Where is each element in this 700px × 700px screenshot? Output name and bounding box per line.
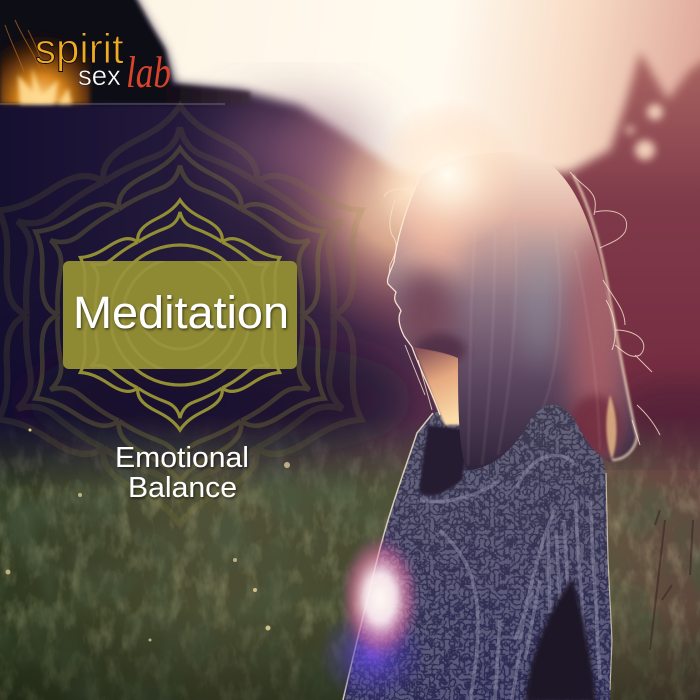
dark tree base bbox=[20, 340, 420, 460]
subtitle bbox=[115, 442, 249, 504]
right tree mass bbox=[540, 40, 700, 470]
meadow light texture bbox=[0, 440, 700, 700]
logo word: lab: lab bbox=[126, 48, 171, 97]
subtitle: Emotional bbox=[115, 442, 249, 474]
hair right warm tone bbox=[570, 230, 626, 470]
face warm glow bbox=[405, 200, 465, 280]
dark dress under shawl bbox=[525, 578, 596, 700]
lit hair strands by the neck bbox=[412, 345, 462, 425]
sun glow over head bbox=[373, 100, 523, 250]
inner lotus ring bbox=[59, 200, 301, 430]
profile rim light bbox=[387, 177, 440, 415]
flyaway hairs bbox=[384, 172, 660, 445]
sun glow on trees bbox=[260, 40, 560, 340]
fire sparks bbox=[5, 20, 46, 72]
haze over tree edge bbox=[220, 110, 370, 190]
treetop bright spots bbox=[625, 104, 663, 160]
logo word: spirit: spirit bbox=[35, 25, 124, 72]
hair lit tips bbox=[606, 395, 616, 460]
grass highlights bbox=[6, 428, 290, 642]
fire glow bbox=[0, 25, 90, 104]
face shade bbox=[395, 270, 455, 360]
lace texture bbox=[340, 395, 620, 700]
shawl bbox=[343, 395, 612, 700]
shawl edge light bbox=[343, 413, 433, 700]
lens flare bbox=[317, 534, 427, 700]
grass stems bbox=[650, 510, 693, 650]
middle lotus ring bbox=[5, 148, 355, 482]
right dark band bbox=[610, 380, 700, 470]
title: Meditation bbox=[73, 287, 289, 338]
logo word: sex: sex bbox=[78, 60, 121, 91]
chakra mandala emblem bbox=[0, 106, 400, 524]
sky bbox=[125, 0, 700, 182]
logo divider bbox=[0, 103, 225, 105]
lace bands and fringe bbox=[420, 455, 600, 700]
subtitle: Balance bbox=[128, 472, 237, 504]
hair strands bbox=[467, 279, 601, 464]
hair blue sheen bbox=[524, 235, 556, 365]
outer lotus ring bbox=[0, 106, 400, 524]
neckline shadow bbox=[419, 425, 470, 495]
hair lower maroon bbox=[569, 395, 621, 455]
woman silhouette bbox=[340, 140, 660, 700]
hair rim light bbox=[573, 175, 637, 460]
mandala lines seen through box bbox=[80, 261, 280, 369]
head and hair bbox=[388, 156, 636, 470]
title box bbox=[63, 261, 297, 369]
meadow dark patches bbox=[0, 450, 700, 698]
shawl right edge light bbox=[606, 473, 612, 690]
flames bbox=[18, 68, 72, 104]
logo bbox=[35, 25, 171, 97]
meadow shading bbox=[0, 500, 700, 700]
logo panel background bbox=[0, 0, 250, 104]
meadow bbox=[0, 400, 700, 700]
neck shade bbox=[414, 334, 466, 366]
